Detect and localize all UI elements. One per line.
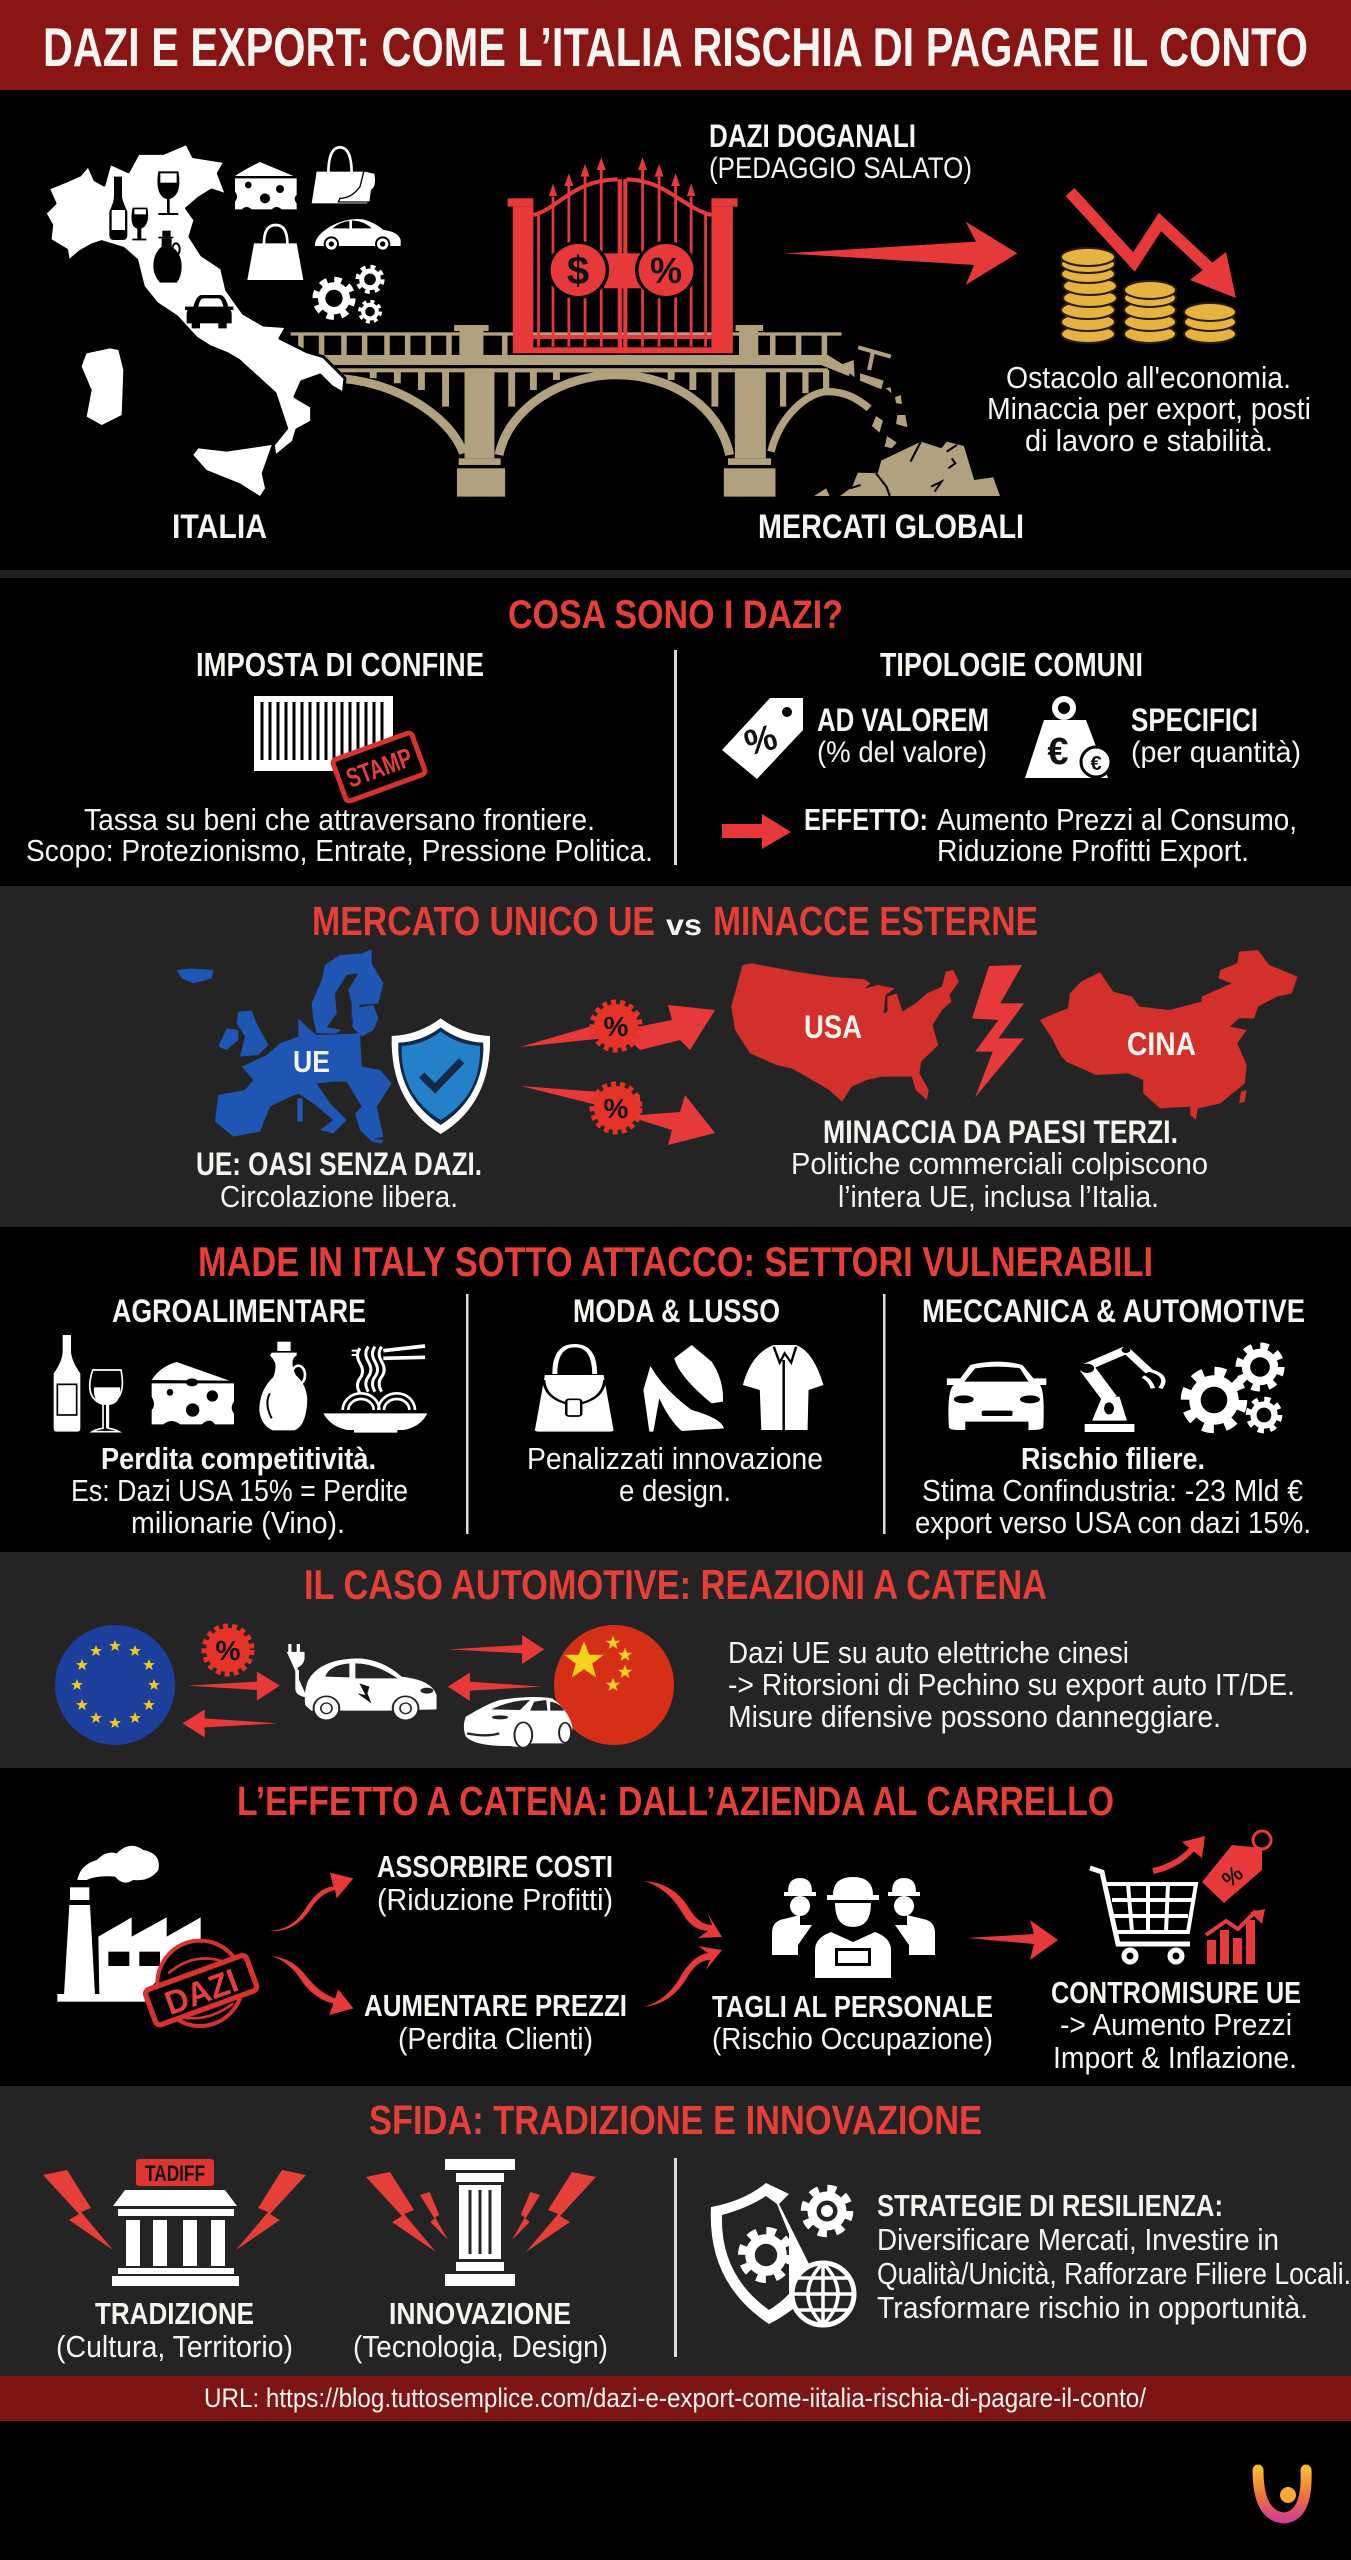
column: mechanics bbox=[915, 1293, 1311, 1540]
arrows: branch arrows bbox=[270, 1873, 353, 2015]
column: agrifood: AGROALIMENTARE bbox=[112, 1293, 366, 1329]
icon: workers bbox=[772, 1877, 935, 1978]
icon: shopping cart bbox=[1090, 1868, 1196, 1962]
heading: IL CASO AUTOMOTIVE: REAZIONI A CATENA bbox=[304, 1561, 1047, 1608]
icon: wine glass bbox=[90, 1370, 122, 1432]
label: China: CINA bbox=[1127, 1026, 1196, 1062]
text: layoffs: (Rischio Occupazione) bbox=[712, 2021, 993, 2056]
panel: EU single market vs external threats bbox=[0, 886, 1351, 1227]
arrow: upper tariff arrow bbox=[520, 1002, 715, 1050]
icon: large wine glass bbox=[157, 171, 179, 215]
text: resilience strategies: Trasformare rischio in opportunità. bbox=[877, 2290, 1308, 2325]
text: absorb costs bbox=[377, 1849, 613, 1917]
icon: percent badge bbox=[204, 1626, 252, 1674]
text: absorb costs: ASSORBIRE COSTI bbox=[377, 1849, 613, 1884]
map: Italy bbox=[45, 143, 345, 496]
icon: pasta bowl bbox=[323, 1346, 427, 1433]
icon: wine bottle bbox=[54, 1335, 80, 1432]
icon: shirt bbox=[743, 1345, 823, 1430]
icon: percent tag bbox=[722, 698, 803, 779]
subheading: border tax: IMPOSTA DI CONFINE bbox=[196, 646, 484, 683]
text: raise prices bbox=[364, 1988, 627, 2056]
column: fashion bbox=[527, 1293, 823, 1508]
text: effect: EFFETTO: bbox=[804, 802, 928, 837]
text: EU countermeasures: Import & Inflazione. bbox=[1053, 2040, 1297, 2075]
text: fashion impact: e design. bbox=[619, 1473, 731, 1508]
gate symbols: $ bbox=[567, 249, 589, 293]
text: obstacle to the economy bbox=[987, 360, 1311, 458]
icon: column under attack bbox=[366, 2159, 596, 2286]
icon: percent badge: % bbox=[216, 1635, 241, 1666]
text: tradition bbox=[56, 2296, 293, 2364]
subheading: common types: TIPOLOGIE COMUNI bbox=[880, 646, 1143, 683]
text: EU oasis: Circolazione libera. bbox=[220, 1179, 458, 1214]
icon: EU flag bbox=[55, 1625, 175, 1745]
text: source URL: URL: https://blog.tuttosemplice.com/dazi-e-export-come-iitalia-rischia-di-pagare-il-conto/ bbox=[204, 2383, 1146, 2413]
text: ad valorem bbox=[817, 702, 989, 769]
icon: logo bbox=[1258, 2470, 1306, 2518]
heading: SFIDA: TRADIZIONE E INNOVAZIONE bbox=[369, 2097, 982, 2143]
icon: falling red arrow bbox=[1070, 192, 1236, 298]
text: specific: (per quantità) bbox=[1131, 736, 1301, 769]
label: customs duties: DAZI DOGANALI bbox=[709, 118, 916, 154]
text: obstacle to the economy: Ostacolo all'economia. bbox=[1006, 360, 1291, 395]
bridge bbox=[291, 325, 1000, 497]
heading: L’EFFETTO A CATENA: DALL’AZIENDA AL CARRELLO bbox=[237, 1778, 1114, 1824]
text: resilience strategies bbox=[877, 2188, 1351, 2325]
map: China bbox=[1040, 950, 1297, 1120]
gate symbols: % bbox=[650, 250, 682, 291]
text: EU oasis bbox=[196, 1146, 482, 1214]
icon: price tag bbox=[1202, 1831, 1271, 1903]
icon: China flag bbox=[554, 1625, 674, 1745]
icon: high heel bbox=[643, 1366, 724, 1432]
label: UE: UE bbox=[293, 1044, 330, 1079]
text: ad valorem: (% del valore) bbox=[817, 736, 987, 769]
text: threat from third countries: Politiche commerciali colpiscono bbox=[791, 1146, 1208, 1181]
text: ad valorem: AD VALOREM bbox=[817, 702, 989, 738]
text: raise prices: AUMENTARE PREZZI bbox=[364, 1988, 627, 2023]
heading: MINACCE ESTERNE bbox=[713, 898, 1038, 944]
text: specific bbox=[1131, 702, 1301, 769]
gate symbols bbox=[567, 249, 682, 293]
text: absorb costs: (Riduzione Profitti) bbox=[377, 1882, 613, 1917]
icon: bag and heel bbox=[312, 147, 376, 203]
text: agrifood impact bbox=[71, 1441, 408, 1540]
arrows: exchanges bbox=[183, 1635, 544, 1737]
text: mechanics impact bbox=[915, 1441, 1311, 1540]
panel: hero bridge illustration bbox=[0, 90, 1351, 578]
text: agrifood impact: Es: Dazi USA 15% = Perdite bbox=[71, 1473, 408, 1508]
text: automotive summary: Dazi UE su auto elettriche cinesi bbox=[728, 1635, 1129, 1670]
text: raise prices: (Perdita Clienti) bbox=[398, 2021, 593, 2056]
icon: weight with euro bbox=[1025, 699, 1111, 778]
icon: factory with tariff stamp bbox=[57, 1846, 259, 2028]
icon: container with stamp bbox=[254, 696, 426, 802]
text: obstacle to the economy: di lavoro e stabilità. bbox=[1025, 423, 1273, 458]
text: mechanics impact: Rischio filiere. bbox=[1021, 1441, 1205, 1476]
icon: handbag bbox=[535, 1346, 614, 1432]
text: effect: Aumento Prezzi al Consumo, bbox=[937, 802, 1297, 837]
text: automotive summary: -> Ritorsioni di Pechino su export auto IT/DE. bbox=[728, 1667, 1295, 1702]
icon: weight with euro: € bbox=[1047, 731, 1069, 773]
icon: small wine glass bbox=[131, 208, 148, 240]
panel: what are tariffs bbox=[0, 578, 1351, 886]
icon: price tag: % bbox=[1217, 1861, 1248, 1892]
text: threat from third countries: l’intera UE, inclusa l’Italia. bbox=[838, 1179, 1159, 1214]
text: threat from third countries bbox=[791, 1114, 1208, 1214]
heading: MERCATO UNICO UE bbox=[312, 898, 655, 944]
heading bbox=[312, 898, 1038, 944]
map: Europe bbox=[177, 949, 392, 1143]
heading: MADE IN ITALY SOTTO ATTACCO: SETTORI VULNERABILI bbox=[198, 1238, 1153, 1285]
icon: shoe bbox=[674, 1345, 723, 1403]
column: fashion: MODA & LUSSO bbox=[573, 1293, 780, 1329]
icon: container with stamp: STAMP bbox=[342, 742, 416, 794]
arrow: lower tariff arrow: % bbox=[604, 1093, 629, 1124]
icon: side car bbox=[315, 219, 401, 251]
text: mechanics impact: Stima Confindustria: -23 Mld € bbox=[922, 1473, 1303, 1508]
text: obstacle to the economy: Minaccia per export, posti bbox=[987, 391, 1311, 426]
icon: gears bbox=[315, 267, 382, 322]
icon: cheese bbox=[235, 162, 297, 209]
panel: chain effect bbox=[0, 1768, 1351, 2086]
footer band bbox=[0, 2376, 1351, 2421]
map: USA bbox=[731, 963, 959, 1102]
text: threat from third countries: MINACCIA DA PAESI TERZI. bbox=[823, 1114, 1178, 1150]
icon: weight with euro: € bbox=[1090, 753, 1102, 775]
text: agrifood impact: Perdita competitività. bbox=[101, 1441, 376, 1476]
icon: handbag bbox=[247, 225, 303, 280]
arrows: merge arrows bbox=[644, 1881, 722, 2007]
icon: lightning bolt bbox=[972, 965, 1024, 1097]
text: definition bbox=[26, 802, 653, 868]
text: automotive summary bbox=[728, 1635, 1295, 1734]
text: innovation: (Tecnologia, Design) bbox=[353, 2329, 608, 2364]
icon: black car bbox=[185, 295, 233, 328]
icon: small car bbox=[464, 1697, 572, 1748]
icon: factory with tariff stamp: DAZI bbox=[160, 1962, 243, 2023]
text: effect: Riduzione Profitti Export. bbox=[937, 833, 1249, 868]
icon: gold coin stacks bbox=[1061, 248, 1236, 343]
icon: red toll gate bbox=[508, 157, 738, 353]
text: definition: Scopo: Protezionismo, Entrate, Pressione Politica. bbox=[26, 833, 653, 868]
text: layoffs: TAGLI AL PERSONALE bbox=[712, 1989, 993, 2024]
panel: made in Italy bbox=[0, 1227, 1351, 1552]
text: layoffs bbox=[712, 1989, 993, 2056]
icons on and around Italy bbox=[109, 147, 401, 328]
text: tradition: (Cultura, Territorio) bbox=[56, 2329, 293, 2364]
text: definition: Tassa su beni che attraversano frontiere. bbox=[84, 802, 595, 837]
label: USA: USA bbox=[804, 1009, 862, 1045]
icon: temple under attack: TADIFF bbox=[145, 2161, 205, 2186]
text: mechanics impact: export verso USA con dazi 15%. bbox=[915, 1505, 1311, 1540]
icon: oil jar bbox=[153, 231, 182, 283]
icon: electric car bbox=[287, 1644, 437, 1720]
arrow: lower tariff arrow bbox=[521, 1084, 715, 1145]
icon: gears bbox=[1186, 1346, 1281, 1431]
label: global markets: MERCATI GLOBALI bbox=[758, 508, 1024, 546]
icon: oil jar bbox=[259, 1342, 307, 1430]
text: EU countermeasures: CONTROMISURE UE bbox=[1051, 1975, 1301, 2010]
icon: car front bbox=[947, 1362, 1046, 1430]
text: innovation bbox=[353, 2296, 608, 2364]
icon: bottle bbox=[109, 177, 127, 240]
text: tradition: TRADIZIONE bbox=[95, 2296, 254, 2331]
panel: challenge bbox=[0, 2086, 1351, 2376]
panel: title band bbox=[0, 0, 1351, 90]
label: customs duties: (PEDAGGIO SALATO) bbox=[709, 152, 972, 185]
icon: rising chart bbox=[1206, 1909, 1265, 1964]
text: specific: SPECIFICI bbox=[1131, 702, 1258, 738]
icon: robot arm bbox=[1080, 1347, 1163, 1432]
icon: temple under attack bbox=[43, 2159, 306, 2286]
arrow: effect bbox=[722, 814, 791, 849]
label: customs duties bbox=[709, 118, 972, 185]
text: resilience strategies: STRATEGIE DI RESILIENZA: bbox=[877, 2188, 1223, 2223]
text: EU oasis: UE: OASI SENZA DAZI. bbox=[196, 1146, 482, 1182]
heading: COSA SONO I DAZI? bbox=[508, 593, 843, 637]
arrow: upper tariff arrow: % bbox=[604, 1011, 629, 1042]
text: fashion impact: Penalizzati innovazione bbox=[527, 1441, 823, 1476]
text: effect bbox=[804, 802, 1297, 868]
text: resilience strategies: Diversificare Mercati, Investire in bbox=[877, 2222, 1279, 2257]
icon: shield with check bbox=[392, 1018, 490, 1134]
heading: vs bbox=[666, 909, 702, 942]
label: Italia: ITALIA bbox=[172, 508, 267, 546]
arrow: workers to countermeasures bbox=[967, 1920, 1058, 1960]
icon: percent tag: % bbox=[740, 716, 781, 764]
text: innovation: INNOVAZIONE bbox=[389, 2296, 571, 2331]
panel: automotive case bbox=[0, 1552, 1351, 1768]
icon: cheese wedge bbox=[152, 1362, 234, 1424]
arrow: tariffs to economy bbox=[785, 222, 1017, 285]
text: EU countermeasures: -> Aumento Prezzi bbox=[1060, 2007, 1292, 2042]
text: fashion impact bbox=[527, 1441, 823, 1508]
column: agrifood bbox=[54, 1293, 427, 1540]
icon: rising arrow bbox=[1153, 1836, 1205, 1871]
icon: resilience shield bbox=[711, 2183, 854, 2325]
text: EU countermeasures bbox=[1051, 1975, 1301, 2075]
text: agrifood impact: milionarie (Vino). bbox=[131, 1505, 345, 1540]
text: automotive summary: Misure difensive possono danneggiare. bbox=[728, 1699, 1221, 1734]
